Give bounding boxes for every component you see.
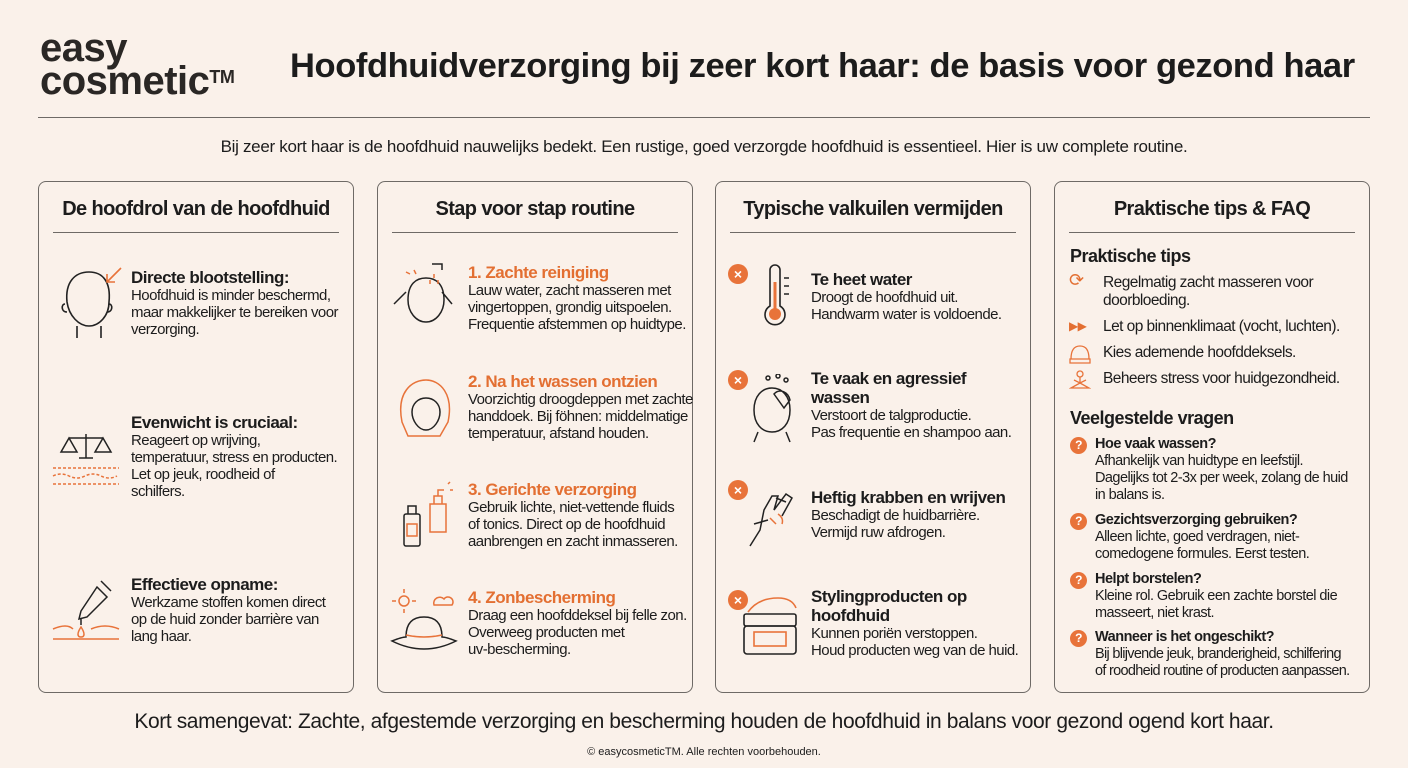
faq 1: ? xyxy=(1075,438,1082,452)
tip 1: Regelmatig zacht masseren voor xyxy=(1103,274,1313,291)
pitfall 1: Te heet water xyxy=(811,270,912,289)
faq 1 xyxy=(1070,436,1348,503)
item: directe blootstelling: Directe blootstelling: xyxy=(131,268,289,287)
pitfall 4: Stylingproducten op xyxy=(811,587,967,606)
tip 1: doorbloeding. xyxy=(1103,292,1190,309)
faq 3 xyxy=(1070,571,1337,621)
item: opname: lang haar. xyxy=(131,628,191,645)
panel: tips & FAQ xyxy=(1054,181,1370,693)
faq 3: Helpt borstelen? xyxy=(1095,571,1201,587)
tip 2: ▶▶ xyxy=(1069,319,1086,333)
item: evenwicht: Evenwicht is cruciaal: xyxy=(131,413,298,432)
step 3: aanbrengen en zacht inmasseren. xyxy=(468,533,678,550)
faq 1: Afhankelijk van huidtype en leefstijl. xyxy=(1095,453,1303,469)
icon: scrubbing xyxy=(728,370,791,442)
icon: jar xyxy=(728,590,797,655)
faq 4: Wanneer is het ongeschikt? xyxy=(1095,629,1274,645)
pitfall 3 xyxy=(811,488,1005,541)
heading: Praktische tips & FAQ xyxy=(1114,198,1310,220)
tip 4: Beheers stress voor huidgezondheid. xyxy=(1103,370,1340,387)
tips list xyxy=(1069,270,1340,389)
item: evenwicht xyxy=(131,413,337,500)
faq 4: Bij blijvende jeuk, branderigheid, schilfering xyxy=(1095,646,1341,662)
item: directe blootstelling: maar makkelijker te bereiken voor xyxy=(131,304,338,321)
pitfall 3: Heftig krabben en wrijven xyxy=(811,488,1005,507)
heading: De hoofdrol van de hoofdhuid xyxy=(62,198,330,220)
logo: cosmeticTM xyxy=(40,59,234,103)
step 1: Lauw water, zacht masseren met xyxy=(468,282,671,299)
faq 1: in balans is. xyxy=(1095,487,1164,503)
step 4: uv-bescherming. xyxy=(468,641,571,658)
subheading: FAQ: Veelgestelde vragen xyxy=(1070,408,1234,428)
step 2 xyxy=(468,372,693,442)
icon: washing xyxy=(394,263,452,323)
item: opname xyxy=(131,575,326,645)
title: Hoofdhuidverzorging bij zeer kort haar: de basis voor gezond haar xyxy=(290,47,1355,85)
pitfall 3: Beschadigt de huidbarrière. xyxy=(811,507,980,524)
icon: bottles xyxy=(403,482,453,547)
step 3: of tonics. Direct op de hoofdhuid xyxy=(468,516,665,533)
step 4 xyxy=(468,588,687,658)
faq 1: Dagelijks tot 2-3x per week, zolang de huid xyxy=(1095,470,1348,486)
tip 1 xyxy=(1069,270,1314,309)
step 2: handdoek. Bij föhnen: middelmatige xyxy=(468,408,688,425)
copyright: © easycosmeticTM. Alle rechten voorbehouden. xyxy=(587,746,821,758)
item: directe blootstelling: Hoofdhuid is minder beschermd, xyxy=(131,287,330,304)
step 4: 4. Zonbescherming xyxy=(468,588,615,607)
step 1: 1. Zachte reiniging xyxy=(468,263,609,282)
item: opname: Effectieve opname: xyxy=(131,575,278,594)
faq 2: Gezichtsverzorging gebruiken? xyxy=(1095,512,1297,528)
panel: routine xyxy=(377,181,693,693)
step 3 xyxy=(468,480,678,550)
faq 2: comedogene formules. Eerst testen. xyxy=(1095,546,1309,562)
pitfall 2: wassen xyxy=(811,388,869,407)
icon: towel xyxy=(400,379,450,437)
faq 1: Hoe vaak wassen? xyxy=(1095,436,1216,452)
faq 2: ? xyxy=(1075,514,1082,528)
pitfall 2: Verstoort de talgproductie. xyxy=(811,407,971,424)
faq 4 xyxy=(1070,629,1349,679)
icon: hand: × xyxy=(734,482,742,498)
tip 1: ⟳ xyxy=(1069,270,1084,290)
pitfall 3: Vermijd ruw afdrogen. xyxy=(811,524,945,541)
step 2: Voorzichtig droogdeppen met zachte xyxy=(468,391,693,408)
heading xyxy=(53,198,339,233)
faq 2: Alleen lichte, goed verdragen, niet- xyxy=(1095,529,1299,545)
item: evenwicht: Let op jeuk, roodheid of xyxy=(131,466,275,483)
step 1: Frequentie afstemmen op huidtype. xyxy=(468,316,686,333)
item: directe blootstelling xyxy=(131,268,338,338)
icon: hand xyxy=(728,480,793,546)
pitfall 4: Houd producten weg van de huid. xyxy=(811,642,1018,659)
tip 3: Kies ademende hoofddeksels. xyxy=(1103,344,1296,361)
intro text: Bij zeer kort haar is de hoofdhuid nauwelijks bedekt. Een rustige, goed verzorgde hoofdhuid is essentieel. Hier is uw complete routine. xyxy=(221,137,1187,156)
icon: balance xyxy=(52,434,119,485)
heading xyxy=(1069,198,1355,233)
icon: scrubbing: × xyxy=(734,372,742,388)
pitfall 1: Droogt de hoofdhuid uit. xyxy=(811,289,958,306)
tip 2: Let op binnenklimaat (vocht, luchten). xyxy=(1103,318,1340,335)
step 3: 3. Gerichte verzorging xyxy=(468,480,636,499)
item: evenwicht: schilfers. xyxy=(131,483,185,500)
heading: Typische valkuilen vermijden xyxy=(743,198,1003,220)
faq 3: masseert, niet krast. xyxy=(1095,605,1214,621)
pitfall 2 xyxy=(811,369,1011,441)
logo: easy xyxy=(40,26,127,70)
item: directe blootstelling: verzorging. xyxy=(131,321,199,338)
panel: valkuilen xyxy=(715,181,1031,693)
heading xyxy=(392,198,678,233)
pitfall 4 xyxy=(811,587,1018,659)
pitfall 4: Kunnen poriën verstoppen. xyxy=(811,625,977,642)
logo xyxy=(40,26,234,103)
step 2: 2. Na het wassen ontzien xyxy=(468,372,657,391)
pitfall 1 xyxy=(811,270,1002,323)
icon: thermometer: × xyxy=(734,266,742,282)
item: opname: Werkzame stoffen komen direct xyxy=(131,594,325,611)
icon: sun hat xyxy=(390,589,458,650)
pitfall 4: hoofdhuid xyxy=(811,606,890,625)
panel: hoofdrol xyxy=(38,181,354,693)
item: evenwicht: temperatuur, stress en producten. xyxy=(131,449,337,466)
item: evenwicht: Reageert op wrijving, xyxy=(131,432,260,449)
faq 2 xyxy=(1070,512,1309,562)
faq 3: ? xyxy=(1075,573,1082,587)
icon: head xyxy=(61,267,122,338)
step 3: Gebruik lichte, niet-vettende fluids xyxy=(468,499,674,516)
step 2: temperatuur, afstand houden. xyxy=(468,425,649,442)
step 1 xyxy=(468,263,686,333)
faq 3: Kleine rol. Gebruik een zachte borstel die xyxy=(1095,588,1337,604)
subheading: tips: Praktische tips xyxy=(1070,246,1191,266)
icon: dropper xyxy=(52,580,120,640)
icon: jar: × xyxy=(734,592,742,608)
pitfall 2: Pas frequentie en shampoo aan. xyxy=(811,424,1011,441)
pitfall 2: Te vaak en agressief xyxy=(811,369,966,388)
item: opname: op de huid zonder barrière van xyxy=(131,611,319,628)
pitfall 1: Handwarm water is voldoende. xyxy=(811,306,1002,323)
faq 4: ? xyxy=(1075,631,1082,645)
icon: thermometer xyxy=(728,264,789,326)
faq 4: of roodheid routine of producten aanpassen. xyxy=(1095,663,1349,679)
heading xyxy=(730,198,1016,233)
summary: Kort samengevat: Zachte, afgestemde verzorging en bescherming houden de hoofdhuid in balans voor gezond ogend kort haar. xyxy=(134,710,1274,733)
heading: Stap voor stap routine xyxy=(435,198,635,220)
step 4: Draag een hoofddeksel bij felle zon. xyxy=(468,607,687,624)
step 4: Overweeg producten met xyxy=(468,624,624,641)
step 1: vingertoppen, grondig uitspoelen. xyxy=(468,299,672,316)
